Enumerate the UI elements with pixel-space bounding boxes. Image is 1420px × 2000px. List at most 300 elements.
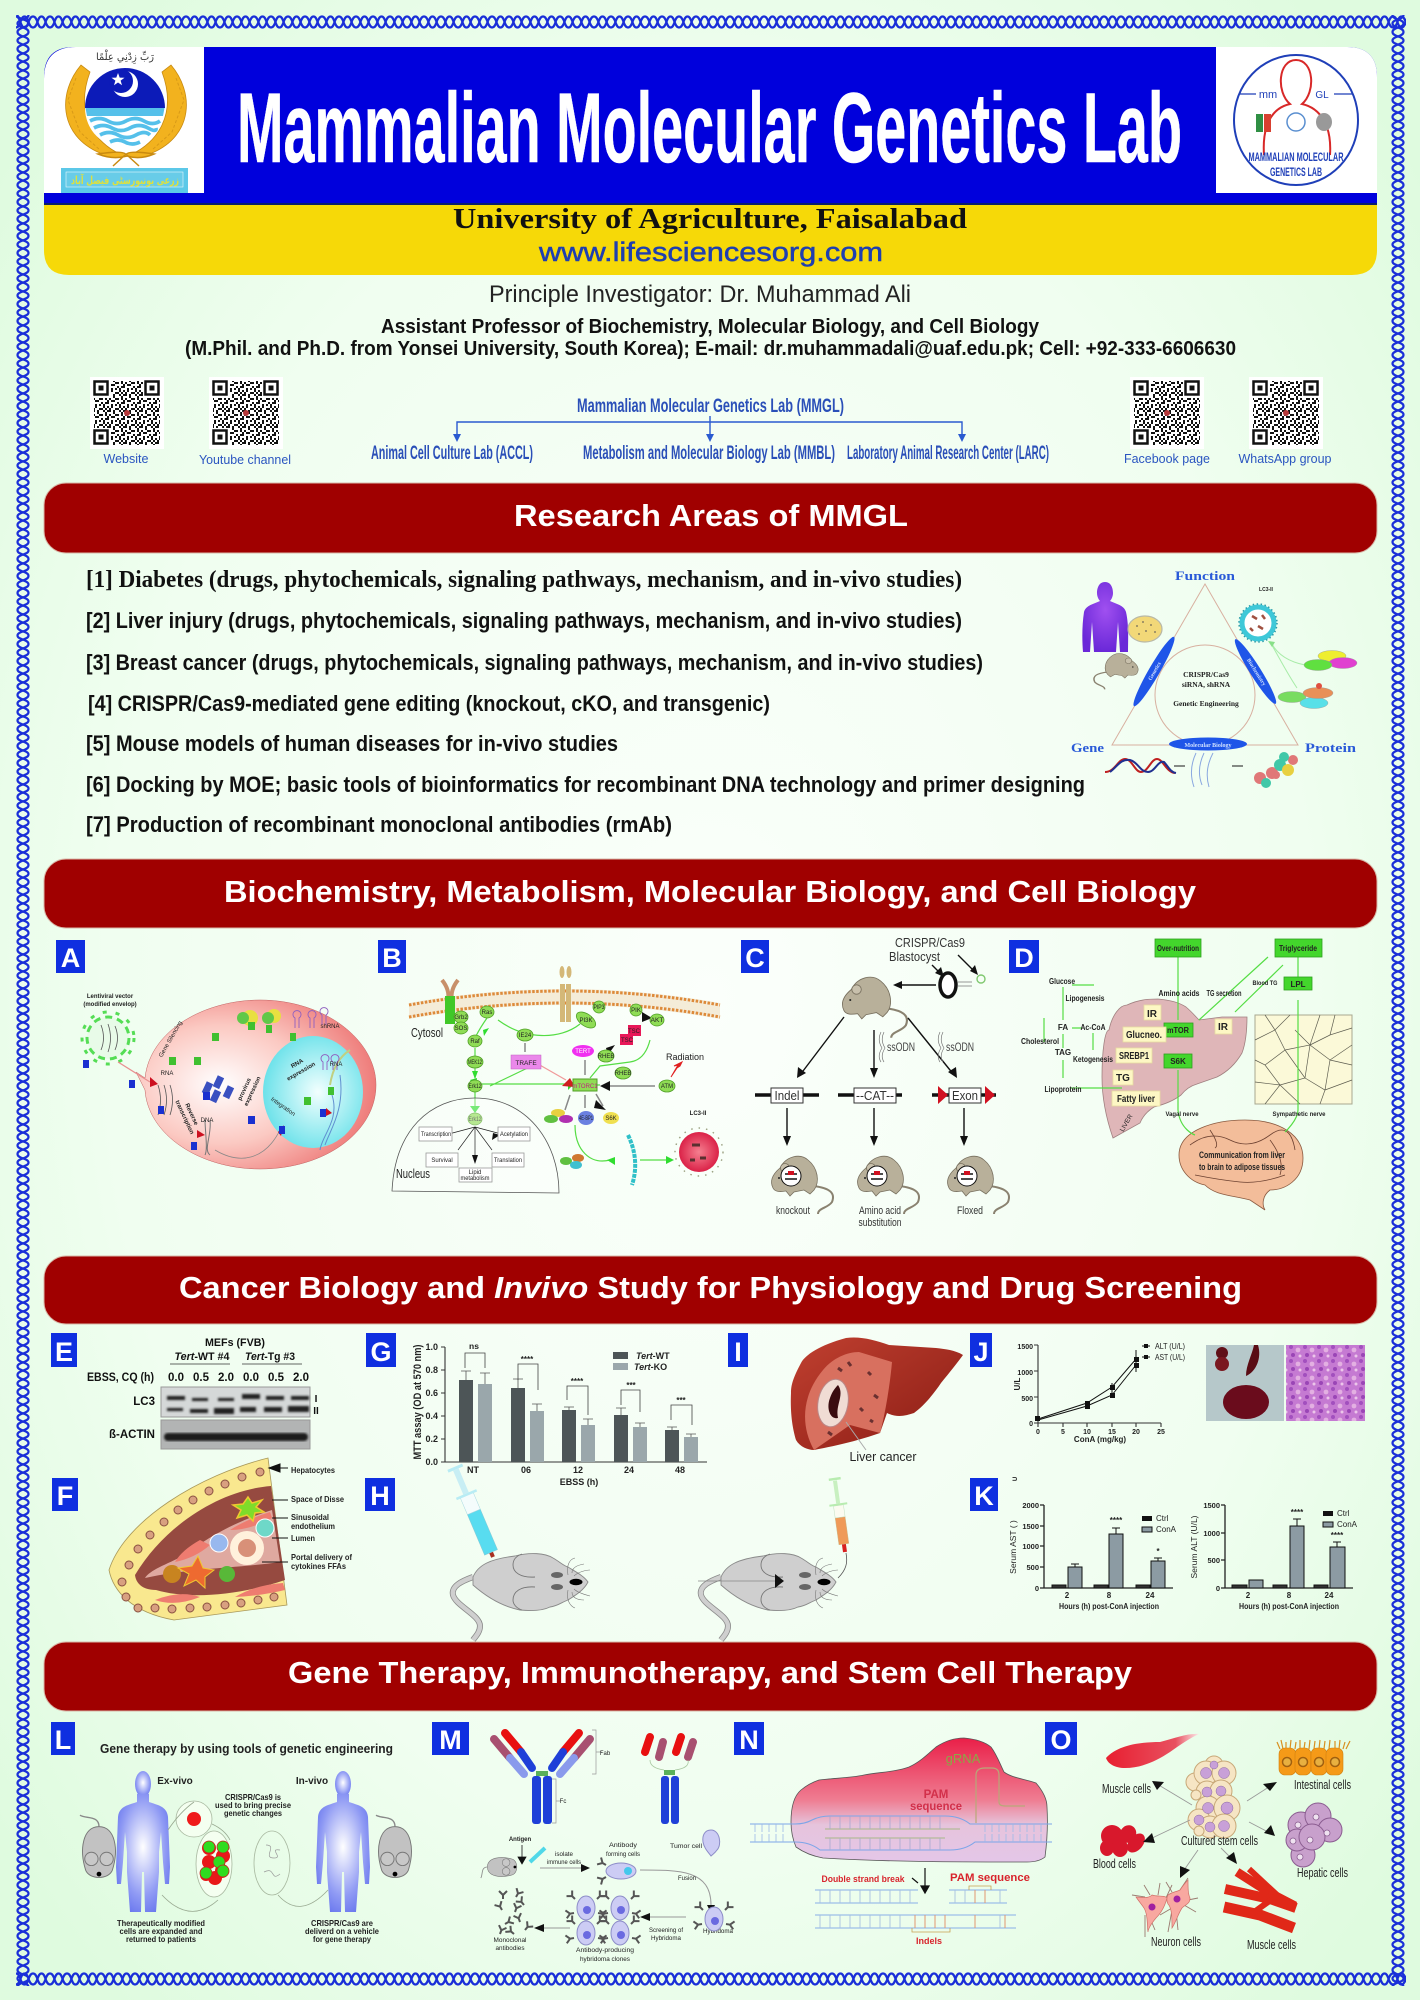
RISC complexes <box>237 1009 281 1026</box>
hepatic cells <box>1286 1803 1342 1867</box>
blot headers: Tert-Tg #3 <box>245 1351 295 1363</box>
org chart branch LARC: Laboratory Animal Research Center (LARC) <box>847 443 1049 464</box>
LC3 blot: II <box>313 1406 319 1417</box>
bottom captions: Therapeutically modified <box>117 1918 205 1928</box>
logo panel: university of agriculture <box>44 47 204 193</box>
workflow text: Fusion <box>678 1875 696 1882</box>
label A <box>56 940 85 973</box>
cell text: RNA <box>161 1071 173 1077</box>
banner divider <box>44 203 1377 205</box>
item 7: [7] Production of recombinant monoclonal antibodies (rmAb) <box>86 812 672 837</box>
nucleus dome: Lipid <box>469 1170 481 1176</box>
QR: website: Website <box>104 452 149 466</box>
axis labels: 06 <box>521 1465 531 1475</box>
workflow text: Screening of <box>649 1927 683 1934</box>
AST labels: **** <box>1110 1516 1123 1525</box>
blot headers: MEFs (FVB) <box>205 1337 265 1349</box>
ALT legend: ConA <box>1337 1520 1358 1529</box>
fragment antibody <box>645 1737 693 1824</box>
cell text: expression <box>286 1061 317 1083</box>
yellow boxes <box>1112 1005 1232 1106</box>
label C: C <box>745 943 765 973</box>
panel O: stem cell therapy <box>1045 1722 1351 1952</box>
centre text: Biochemistry <box>1245 658 1267 687</box>
PAM text: sequence <box>910 1801 962 1813</box>
tick labels: ConA (mg/kg) <box>1074 1435 1126 1444</box>
ALT bars <box>1232 1519 1345 1588</box>
lower arrow <box>912 1868 929 1893</box>
gene constructs: --CAT-- <box>856 1088 894 1103</box>
legend: AST (U/L) <box>1155 1352 1185 1362</box>
cut DNA <box>815 1886 1016 1932</box>
intestinal cells <box>1277 1740 1350 1775</box>
label F <box>52 1478 78 1511</box>
tick labels: 0.6 <box>425 1388 438 1398</box>
PAM text <box>910 1789 962 1813</box>
tick labels: 25 <box>1157 1429 1165 1436</box>
pathway labels <box>1021 977 1326 1133</box>
panel C: CRISPR mouse generation <box>741 936 1009 1229</box>
item 2: [2] Liver injury (drugs, phytochemicals, signaling pathways, mechanism, and in-vivo studies) <box>86 608 962 633</box>
axes <box>441 1347 707 1462</box>
icon: wheat wreath <box>66 65 186 166</box>
workflow text: Antibody-producing <box>576 1947 634 1954</box>
green boxes: LPL <box>1290 980 1306 989</box>
cell body <box>136 1000 376 1169</box>
QR: whatsapp <box>1238 377 1332 466</box>
legend <box>1142 1341 1185 1362</box>
curved arrows <box>162 1802 328 1911</box>
pathway nodes: RHEB <box>615 1071 631 1077</box>
blot headers: Tert-WT #4 <box>174 1351 230 1363</box>
QR: youtube <box>199 377 291 467</box>
endothelium <box>155 1512 285 1603</box>
pathway labels: TAG <box>1055 1048 1071 1057</box>
arrows <box>787 955 976 1140</box>
label J <box>970 1333 992 1367</box>
blot headers: 0.5 <box>268 1372 285 1384</box>
result mice <box>772 1156 1009 1214</box>
label L <box>51 1722 75 1755</box>
axes <box>1034 1345 1161 1427</box>
black arrowheads <box>594 1012 652 1110</box>
QR: facebook: Facebook page <box>1124 452 1210 466</box>
blot headers: 2.0 <box>218 1372 234 1384</box>
cut labels: Double strand break <box>822 1874 905 1885</box>
mouse with tail-vein injection <box>698 1476 854 1640</box>
logo caption <box>1248 150 1344 179</box>
panel F: liver sinusoid <box>52 1458 352 1620</box>
corner labels <box>1071 568 1357 755</box>
workflow text: antibodies <box>496 1945 525 1952</box>
axis labels: MTT assay (OD at 570 nm) <box>412 1344 424 1460</box>
CRISPR caption: used to bring precise <box>215 1800 291 1810</box>
ALT labels: Serum ALT (U/L) <box>1189 1515 1199 1578</box>
tick labels <box>425 1342 438 1467</box>
tick labels: 5 <box>1061 1429 1065 1436</box>
gene constructs <box>755 1086 996 1104</box>
org chart arrows <box>453 416 966 442</box>
green boxes: Over-nutrition <box>1157 944 1199 953</box>
panel H: mouse injections <box>365 1462 854 1640</box>
workflow text: Hybridoma <box>703 1928 733 1935</box>
label B: B <box>382 943 402 973</box>
DNA in complex <box>750 1816 1052 1850</box>
label M <box>432 1722 469 1755</box>
muscle fibers <box>1224 1869 1296 1928</box>
university name: University of Agriculture, Faisalabad <box>453 204 967 235</box>
antibody forming cell <box>597 1858 636 1884</box>
vector ellipse <box>254 1831 290 1895</box>
centre text: Genetic Engineering <box>1173 699 1239 708</box>
AST labels: 2000 <box>1022 1501 1039 1510</box>
label K <box>970 1478 998 1511</box>
significance brackets: ns <box>469 1341 479 1351</box>
gRNA text: gRNA <box>946 1751 981 1766</box>
yellow boxes: TG <box>1116 1073 1130 1084</box>
icon: lab instruments <box>1256 113 1332 132</box>
human left <box>116 1771 170 1912</box>
panel N: CRISPR gene editing <box>734 1722 1052 1946</box>
AST labels: 1500 <box>1022 1522 1039 1531</box>
green boxes <box>1155 939 1322 1068</box>
cut labels <box>822 1872 1030 1946</box>
label H: H <box>370 1481 390 1511</box>
blot headers <box>87 1337 309 1384</box>
captions: substitution <box>858 1217 902 1229</box>
space of Disse tissue <box>135 1486 285 1595</box>
phagophore <box>628 1135 635 1185</box>
mm and GL markers: mm <box>1259 89 1277 101</box>
ALT chart <box>1189 1501 1358 1611</box>
label O <box>1045 1722 1077 1755</box>
pathway nodes: Erk12 <box>468 1117 482 1123</box>
yellow boxes: SREBP1 <box>1119 1051 1149 1062</box>
LC3 blot: I <box>315 1394 318 1405</box>
pathway labels: Ketogenesis <box>1073 1055 1113 1064</box>
QR: website <box>90 377 164 466</box>
ALT axes <box>1221 1505 1353 1588</box>
AST legend <box>1142 1514 1177 1534</box>
header banner <box>44 47 1377 275</box>
virus: Lentiviral vector <box>87 994 134 1000</box>
label B <box>378 940 406 973</box>
top text <box>889 936 965 964</box>
tumor <box>814 1377 852 1429</box>
captions <box>776 1205 983 1229</box>
nucleus dome: Translation <box>494 1158 522 1164</box>
icon: autophagosome <box>1239 587 1277 642</box>
Cas9 blob <box>791 1738 1047 1862</box>
ALT labels: **** <box>1331 1531 1344 1540</box>
actin blot <box>109 1420 310 1449</box>
panel title: Gene therapy by using tools of genetic engineering <box>100 1742 393 1756</box>
AST labels <box>1008 1477 1160 1611</box>
AST legend: Ctrl <box>1156 1514 1169 1523</box>
cell text: RNA <box>330 1062 342 1068</box>
liver labels: Hepatocytes <box>291 1465 335 1475</box>
pathway labels: Ac-CoA <box>1080 1023 1106 1032</box>
label H <box>365 1478 395 1511</box>
pathway labels: Cholesterol <box>1021 1037 1059 1046</box>
panel J: ConA line chart and images <box>970 1333 1365 1444</box>
pathway labels: Sympathetic nerve <box>1272 1111 1326 1118</box>
differentiation arrows <box>1143 1781 1277 1878</box>
website url: www.lifesciencesorg.com <box>538 237 883 267</box>
label G: G <box>370 1337 392 1367</box>
yellow boxes: IR <box>1147 1009 1158 1020</box>
immune cells <box>163 1497 274 1588</box>
ssODN labels <box>879 1032 974 1062</box>
banner yellow band <box>44 200 1377 275</box>
tick labels: 0 <box>1029 1421 1033 1428</box>
label G <box>366 1333 396 1367</box>
LC3 blot: LC3 <box>133 1396 155 1408</box>
label C <box>741 940 769 973</box>
liver labels: Space of Disse <box>291 1494 344 1504</box>
centre text: Genetics <box>1147 661 1163 682</box>
nucleus dome: metabolism <box>460 1176 490 1182</box>
workflow text: immune cells <box>547 1859 582 1866</box>
LC3 blot <box>133 1387 319 1417</box>
QR: whatsapp: WhatsApp group <box>1238 452 1332 466</box>
axis labels: 24 <box>624 1465 634 1475</box>
bottom captions <box>117 1918 379 1944</box>
tick labels: U/L <box>1013 1377 1022 1390</box>
pathway nodes: TERT <box>575 1049 591 1055</box>
human right <box>316 1771 370 1912</box>
blot headers: 0.0 <box>243 1372 259 1384</box>
brain: Communication from liver <box>1199 1150 1285 1161</box>
CRISPR caption: CRISPR/Cas9 is <box>225 1792 281 1802</box>
principal investigator block <box>185 281 1236 360</box>
axis labels: EBSS (h) <box>560 1477 598 1487</box>
significance brackets <box>465 1341 692 1425</box>
cell text: Integration <box>269 1097 296 1118</box>
virus <box>82 994 137 1064</box>
gene constructs: Indel <box>774 1088 800 1103</box>
pathway nodes: PIP3 <box>594 1005 605 1011</box>
diagram: genetic engineering triangle <box>1071 568 1357 788</box>
pathway labels: Vagal nerve <box>1166 1111 1199 1118</box>
significance brackets: **** <box>571 1377 584 1386</box>
pathway labels: Lipoprotein <box>1044 1085 1082 1094</box>
top text: CRISPR/Cas9 <box>895 936 965 950</box>
panel K: serum bar charts <box>970 1477 1358 1611</box>
green pathway lines <box>1044 957 1298 1135</box>
ALT labels: 1500 <box>1203 1501 1220 1510</box>
workflow arrows <box>534 1864 715 1932</box>
mm and GL markers <box>1240 89 1352 101</box>
yellow boxes: Glucneo. <box>1126 1030 1162 1041</box>
ssODN labels: ssODN <box>946 1040 974 1054</box>
axis labels: NT <box>467 1465 479 1475</box>
centre text: siRNA, shRNA <box>1182 680 1231 689</box>
green boxes: Triglyceride <box>1279 944 1317 953</box>
urdu name plate: زرعی یونیورسٹی فیصل آباد <box>71 173 179 187</box>
tick labels: 10 <box>1083 1429 1091 1436</box>
numbered steps <box>83 1022 334 1150</box>
AST labels: 8 <box>1107 1591 1112 1600</box>
workflow text: Monoclonal <box>494 1937 527 1944</box>
pathway labels: LIVER <box>1119 1113 1135 1133</box>
label N: N <box>739 1725 759 1755</box>
green boxes: mTOR <box>1167 1026 1189 1035</box>
gRNA hairpin <box>976 1768 1025 1823</box>
cell labels: Muscle cells <box>1247 1938 1296 1952</box>
bars <box>459 1371 698 1462</box>
cell text <box>158 1020 342 1136</box>
bottom captions: cells are expanded and <box>120 1926 202 1936</box>
bottom captions: for gene therapy <box>313 1934 371 1944</box>
blot headers: 2.0 <box>293 1372 309 1384</box>
blood cells <box>1100 1822 1148 1857</box>
logo caption: GENETICS LAB <box>1270 165 1322 179</box>
corner labels: Function <box>1175 568 1236 583</box>
hepatocyte band <box>109 1458 287 1620</box>
series <box>1038 1359 1136 1420</box>
item 4: [4] CRISPR/Cas9-mediated gene editing (knockout, cKO, and transgenic) <box>88 691 770 716</box>
cell labels: Intestinal cells <box>1294 1778 1351 1792</box>
legend: ALT (U/L) <box>1155 1341 1185 1351</box>
tick labels <box>1013 1344 1165 1444</box>
ALT labels: 1000 <box>1203 1529 1220 1538</box>
panel B: signaling pathway <box>378 940 723 1193</box>
blot headers: 0.5 <box>193 1372 210 1384</box>
label M: M <box>439 1725 462 1755</box>
blot headers: EBSS, CQ (h) <box>87 1372 154 1384</box>
heading: cancer biology: Cancer Biology and Invivo Study for Physiology and Drug Screening <box>179 1270 1242 1305</box>
gene constructs: Exon <box>952 1088 978 1103</box>
mice <box>80 1815 411 1877</box>
AST labels: 0 <box>1035 1584 1039 1593</box>
AST labels: 1000 <box>1022 1542 1039 1551</box>
tick labels: 0.2 <box>425 1434 438 1444</box>
tick labels: 1000 <box>1017 1370 1033 1377</box>
pathway nodes: TSC <box>628 1029 641 1035</box>
label A: A <box>61 943 80 973</box>
AST labels: * <box>1156 1547 1160 1556</box>
icon: protein complexes <box>1268 641 1357 708</box>
cell labels: Neuron cells <box>1151 1935 1201 1949</box>
ALT labels: 500 <box>1207 1556 1220 1565</box>
motto text: رَبِّ زِدْنِي عِلْمًا <box>96 49 154 64</box>
pathway nodes: mTORC1 <box>572 1084 598 1090</box>
workflow text: hybridoma clones <box>580 1956 631 1963</box>
tick labels: 1.0 <box>425 1342 438 1352</box>
AST chart <box>1008 1477 1177 1611</box>
autolysosome: LC3-II <box>690 1111 707 1117</box>
stem cell cluster <box>1186 1756 1240 1838</box>
centre text: Molecular Biology <box>1184 743 1232 749</box>
workflow text: Tumor cell <box>670 1843 703 1850</box>
entry arrow <box>118 1062 150 1082</box>
cytosol label: Cytosol <box>411 1026 443 1040</box>
ex-vivo in-vivo labels: In-vivo <box>296 1776 328 1787</box>
investigator contact: (M.Phil. and Ph.D. from Yonsei University, South Korea); E-mail: dr.muhammadali@uaf.edu.pk; Cell: +92-333-6606630 <box>185 338 1236 360</box>
pathway nodes: SOS <box>455 1026 467 1032</box>
bottom captions: deliverd on a vehicle <box>305 1926 379 1936</box>
mm and GL markers: GL <box>1315 90 1329 101</box>
item 5: [5] Mouse models of human diseases for in-vivo studies <box>86 731 618 756</box>
item 3: [3] Breast cancer (drugs, phytochemicals, signaling pathways, mechanism, and in-vivo studies) <box>86 650 983 675</box>
cell text: Gene Silencing <box>158 1020 184 1059</box>
logo ring <box>1234 55 1358 185</box>
pathway labels: Blood TG <box>1252 980 1278 987</box>
yellow boxes: IR <box>1218 1022 1229 1033</box>
ALT legend <box>1323 1509 1358 1529</box>
org chart branch MMBL: Metabolism and Molecular Biology Lab (MMBL) <box>583 443 835 464</box>
workflow text: Hybridoma <box>651 1935 681 1942</box>
cell text: transcription <box>173 1100 195 1136</box>
AST labels: Serum AST ( ) <box>1008 1520 1018 1574</box>
axis labels: 48 <box>675 1465 685 1475</box>
ALT labels: 8 <box>1287 1591 1292 1600</box>
ex-vivo in-vivo labels: Ex-vivo <box>157 1776 193 1787</box>
investigator title: Assistant Professor of Biochemistry, Molecular Biology, and Cell Biology <box>381 316 1040 338</box>
tick labels: 20 <box>1132 1429 1140 1436</box>
ALT labels: Hours (h) post-ConA injection <box>1239 1601 1339 1611</box>
investigator name: Principle Investigator: Dr. Muhammad Ali <box>489 281 911 308</box>
tick labels: 500 <box>1021 1396 1033 1403</box>
radiation icon <box>666 1052 704 1077</box>
ALT labels: 24 <box>1325 1591 1334 1600</box>
tick labels: 0.0 <box>425 1457 438 1467</box>
markers <box>1035 1350 1139 1421</box>
blot headers: 0.0 <box>168 1372 184 1384</box>
liver labels: cytokines FFAs <box>291 1561 346 1571</box>
icon: autophagosome: LC3-II <box>1259 587 1274 593</box>
red arrowheads <box>150 1077 332 1138</box>
pathway connectors <box>475 1018 668 1161</box>
label E <box>51 1333 77 1367</box>
full antibody: Fc <box>560 1799 566 1805</box>
brain: to brain to adipose tissues <box>1199 1162 1285 1173</box>
virus: (modified envelop) <box>83 1002 137 1008</box>
CRISPR caption: genetic changes <box>224 1808 282 1818</box>
hepatocyte nuclei <box>118 1468 278 1613</box>
cell membrane <box>409 989 720 1019</box>
icon: human bust <box>1082 582 1128 652</box>
icon: adult mouse <box>842 977 907 1038</box>
blastocyst ring <box>940 973 985 997</box>
centre text: CRISPR/Cas9 <box>1183 670 1229 679</box>
AST labels: 2 <box>1065 1591 1070 1600</box>
AST labels: 500 <box>1026 1563 1039 1572</box>
pathway labels: Lipogenesis <box>1066 994 1105 1003</box>
QR: youtube: Youtube channel <box>199 453 291 467</box>
liver labels: Lumen <box>291 1533 315 1543</box>
cell labels: Muscle cells <box>1102 1782 1151 1796</box>
tick labels: 0.4 <box>425 1411 438 1421</box>
label I <box>728 1333 748 1367</box>
cut labels: PAM sequence <box>950 1872 1030 1884</box>
liver shape <box>1102 999 1247 1138</box>
label D <box>1009 940 1039 973</box>
AST legend: ConA <box>1156 1525 1177 1534</box>
ALT labels: 0 <box>1216 1584 1220 1593</box>
CRISPR caption <box>215 1792 291 1818</box>
ALT labels: **** <box>1291 1508 1304 1517</box>
org chart root: Mammalian Molecular Genetics Lab (MMGL) <box>577 396 844 417</box>
panel M: monoclonal antibodies <box>432 1722 735 1963</box>
banner blue band <box>44 47 1377 205</box>
logo panel: MMGL <box>1216 47 1377 193</box>
cell text: Reverse <box>183 1103 199 1127</box>
organ photo <box>1206 1345 1284 1421</box>
heading: research areas <box>44 483 1377 553</box>
label E: E <box>55 1337 73 1367</box>
